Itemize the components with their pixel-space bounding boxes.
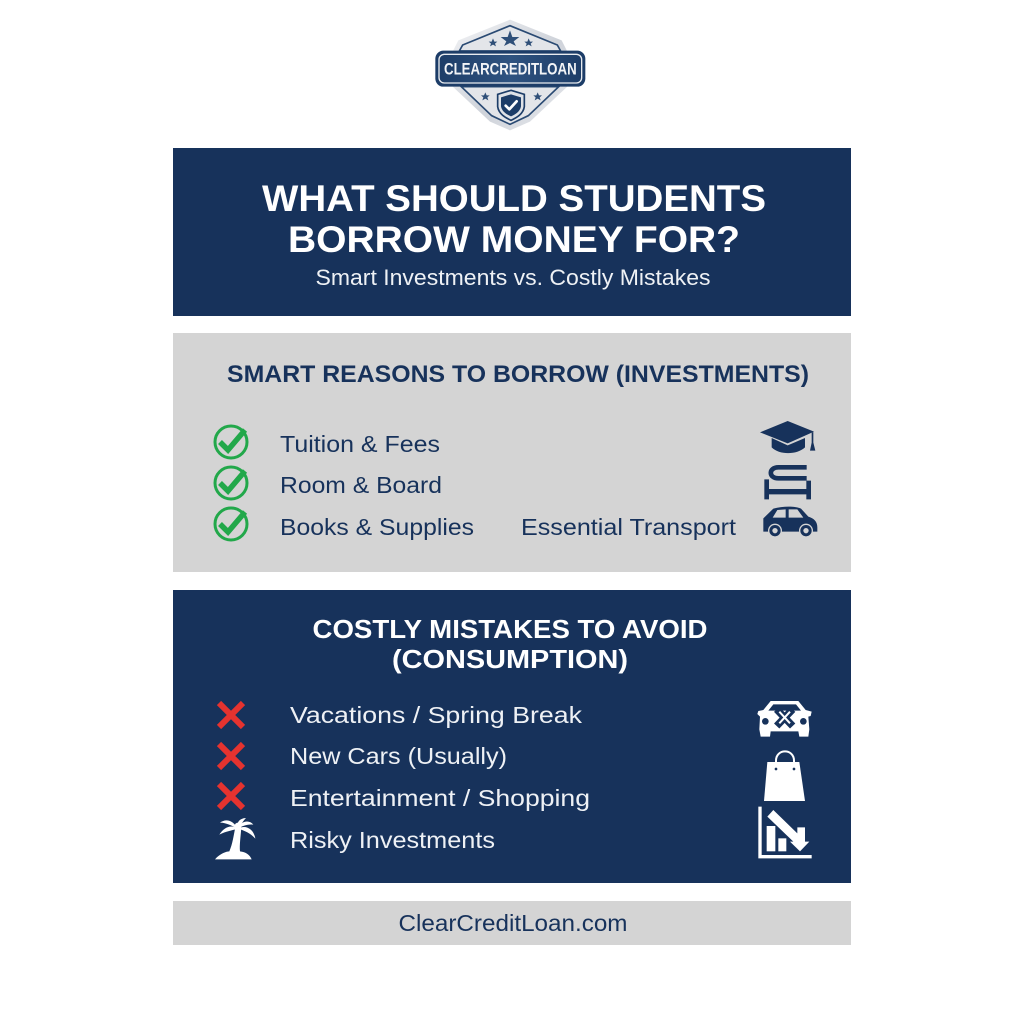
list: costly items	[290, 702, 590, 853]
icon: crossed-out car	[757, 701, 812, 737]
footer: website: ClearCreditLoan.com	[398, 910, 628, 936]
list: smart items: Room & Board	[280, 472, 442, 498]
list: smart items: Tuition & Fees	[280, 431, 440, 457]
list: smart items	[280, 431, 736, 540]
logo: ClearCreditLoan shield	[435, 20, 585, 130]
list: smart items: Books & Supplies	[280, 514, 474, 540]
icon: green check 2	[215, 467, 247, 499]
panel: title header	[173, 148, 851, 316]
icon: car	[763, 507, 817, 537]
list: costly items: Vacations / Spring Break	[290, 702, 582, 728]
logo: ClearCreditLoan shield: CLEARCREDITLOAN	[444, 60, 577, 79]
icon: books and bed	[767, 467, 809, 499]
panel: smart reasons to borrow	[173, 333, 851, 572]
list: costly items: Risky Investments	[290, 827, 495, 853]
icon: falling chart	[758, 807, 812, 858]
panel: costly mistakes to avoid	[173, 590, 851, 883]
list: costly items: Entertainment / Shopping	[290, 785, 590, 811]
heading: main title: BORROW MONEY FOR?	[288, 219, 740, 260]
heading: main title	[262, 178, 766, 260]
icon: red cross 1	[219, 703, 243, 727]
footer: website	[173, 901, 851, 945]
icon: graduation cap	[760, 421, 815, 453]
icon: green check 1	[215, 426, 247, 458]
icon: green check 3	[215, 508, 247, 540]
icon: red cross 3	[219, 784, 243, 808]
heading: smart reasons: SMART REASONS TO BORROW (INVESTMENTS)	[227, 361, 809, 388]
subtitle: Smart Investments vs. Costly Mistakes	[316, 265, 710, 290]
heading: costly mistakes: (CONSUMPTION)	[392, 644, 628, 674]
icon: shopping bag	[764, 751, 805, 801]
list: costly items: New Cars (Usually)	[290, 743, 507, 769]
heading: main title: WHAT SHOULD STUDENTS	[262, 178, 766, 219]
icon: red cross 2	[219, 744, 243, 768]
heading: costly mistakes: COSTLY MISTAKES TO AVOID	[312, 614, 708, 644]
icon: palm tree	[215, 818, 255, 859]
list: smart items: Essential Transport	[521, 514, 736, 540]
heading: costly mistakes	[312, 614, 708, 674]
